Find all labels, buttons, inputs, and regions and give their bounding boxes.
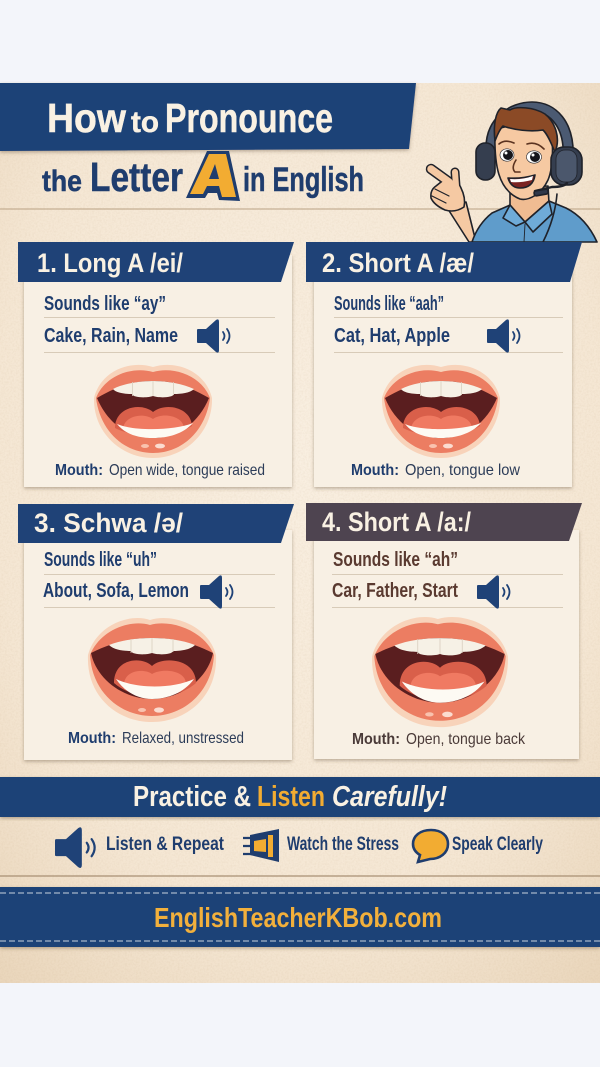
practice banner	[0, 777, 600, 817]
headband	[486, 102, 573, 158]
neck	[510, 186, 549, 224]
eyebrows and nose	[499, 141, 544, 172]
panel: card 2 short A	[306, 242, 582, 487]
practice heading: Listen	[257, 781, 325, 813]
tip text: Speak Clearly	[452, 834, 543, 855]
ear cups	[476, 143, 495, 180]
card 1 mouth illustration	[94, 365, 212, 458]
card 3 sound: Sounds like “uh”	[44, 549, 157, 571]
card 4 mouth caption: Open, tongue back	[406, 731, 526, 748]
card 1 mouth caption: Mouth:	[55, 462, 103, 479]
icon: speaker	[197, 319, 230, 353]
icon: speaker	[477, 575, 510, 609]
card 2 examples: Cat, Hat, Apple	[334, 325, 450, 347]
card 2 mouth illustration	[382, 365, 500, 458]
practice heading: Carefully!	[332, 781, 447, 813]
website URL: EnglishTeacherKBob.com	[154, 902, 442, 933]
microphone boom	[535, 183, 567, 191]
card 4 heading: 4. Short A /a:/	[322, 507, 471, 537]
card 2 mouth caption: Open, tongue low	[405, 462, 520, 479]
eyes	[500, 149, 542, 163]
card 1 header	[18, 242, 294, 282]
card 3 mouth caption	[68, 730, 244, 747]
icon: speaker	[200, 575, 232, 609]
card 4 examples: Car, Father, Start	[332, 580, 458, 602]
panel: card 1 long A	[18, 242, 294, 487]
tip: speak clearly	[413, 830, 543, 862]
card 3 heading: 3. Schwa /ə/	[34, 508, 183, 538]
tip text: Listen & Repeat	[106, 834, 225, 855]
title line 1	[47, 95, 333, 141]
card 1 heading: 1. Long A /ei/	[37, 248, 183, 278]
character: teacher with headset	[431, 102, 597, 242]
icon: speaker	[487, 319, 520, 353]
hand	[431, 169, 465, 211]
card 2 mouth caption: Mouth:	[351, 462, 399, 479]
card 3 mouth caption: Mouth:	[68, 730, 116, 747]
tip text: Watch the Stress	[287, 834, 399, 855]
title line 1: Pronounce	[165, 95, 333, 141]
card 4 mouth caption: Mouth:	[352, 731, 400, 748]
big letter A	[186, 151, 240, 201]
icon: speech bubble	[413, 830, 448, 862]
card 1 examples: Cake, Rain, Name	[44, 325, 178, 347]
card 1 mouth caption: Open wide, tongue raised	[109, 462, 265, 479]
icon: megaphone	[243, 829, 279, 862]
panel: card 4 short A	[306, 503, 582, 759]
card 3 mouth caption: Relaxed, unstressed	[122, 730, 244, 747]
header banner	[0, 83, 416, 151]
card 4 mouth caption	[352, 731, 526, 748]
icon: speaker	[55, 827, 95, 868]
panel: card 3 schwa	[18, 504, 294, 760]
title line 1: to	[131, 106, 159, 139]
title line 2: the	[42, 165, 82, 198]
card 4 sound: Sounds like “ah”	[333, 549, 458, 571]
arm	[446, 202, 476, 242]
card 1 mouth caption	[55, 462, 265, 479]
title line 2: in English	[243, 161, 364, 199]
title line 2	[42, 151, 364, 201]
tip: listen and repeat	[55, 827, 225, 868]
smile	[508, 175, 535, 188]
card 4 header	[306, 503, 582, 541]
title line 2: Letter	[90, 154, 183, 200]
face	[495, 125, 553, 199]
card 2 sound: Sounds like “aah”	[334, 293, 444, 315]
title line 1: How	[47, 95, 126, 141]
practice heading: Practice &	[133, 781, 251, 813]
card 2 mouth caption	[351, 462, 520, 479]
card 3 examples: About, Sofa, Lemon	[43, 580, 189, 602]
card 3 mouth illustration	[88, 618, 216, 722]
hair	[494, 108, 557, 152]
card 2 header	[306, 242, 582, 282]
card 2 heading: 2. Short A /æ/	[322, 248, 474, 278]
practice heading	[133, 781, 447, 813]
card 1 sound: Sounds like “ay”	[44, 293, 166, 315]
card 4 mouth illustration	[372, 617, 508, 727]
footer banner	[0, 887, 600, 947]
card 3 header	[18, 504, 294, 543]
shirt	[472, 201, 597, 242]
tip: watch the stress	[243, 829, 399, 862]
